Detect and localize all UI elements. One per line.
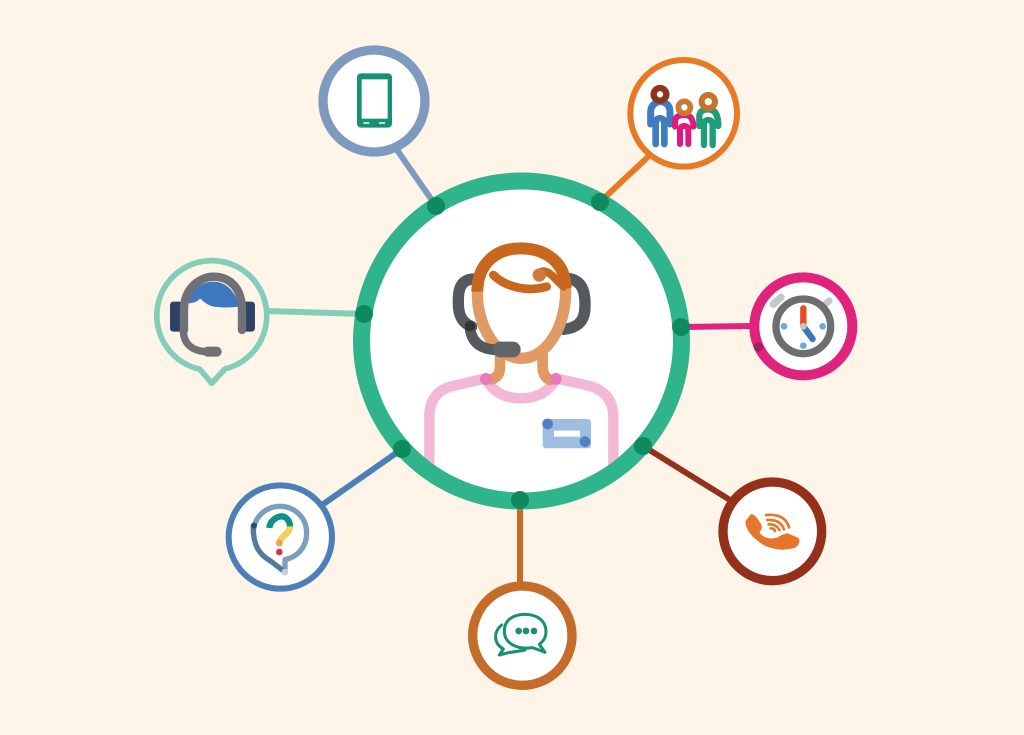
connector: question [322,449,402,505]
connector: headset [267,311,364,314]
icon: family [630,60,737,167]
connector: smartphone [397,150,436,206]
icon: headset speech bubble [157,261,267,383]
icon: smartphone [323,50,425,152]
connector: family [600,155,650,202]
connector: phone call [643,446,730,500]
icon: stopwatch [754,277,852,375]
central green ring [362,181,682,501]
icon: phone call [723,482,822,581]
icon: support agent [429,248,613,465]
icon: question bubble [229,485,332,589]
icon: chat bubbles [473,586,572,685]
ring nodes [355,193,690,509]
central agent panel [355,181,690,509]
connector: stopwatch [681,326,752,327]
connector: chat [517,500,523,583]
